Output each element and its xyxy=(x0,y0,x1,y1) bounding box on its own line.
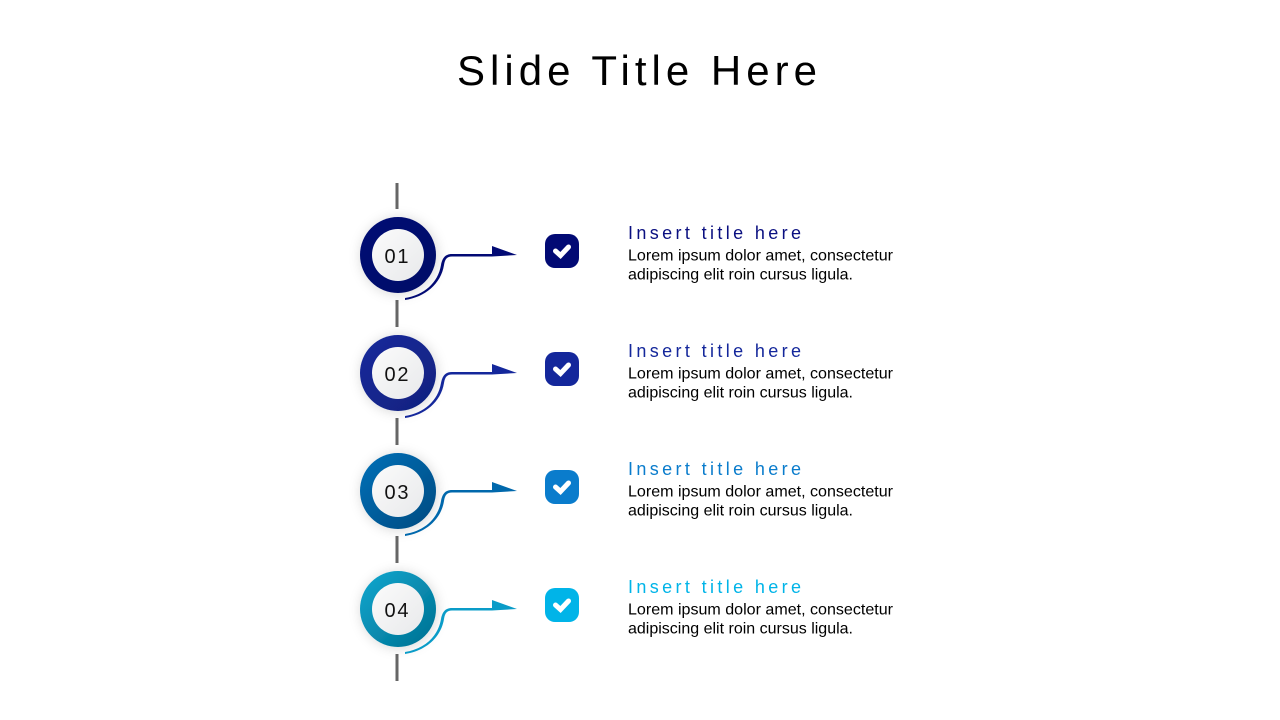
badge 04 xyxy=(360,571,436,647)
arrow connector 03 xyxy=(405,482,517,536)
step 04 xyxy=(360,571,894,654)
badge 04: 04 xyxy=(384,600,408,622)
text block 02: Insert title here xyxy=(628,341,801,361)
timeline segments xyxy=(396,183,398,681)
icon: check 01 xyxy=(545,234,579,268)
text block 03: Lorem ipsum dolor amet, consectetur xyxy=(628,484,894,500)
badge 02 xyxy=(360,335,436,411)
badge 03: 03 xyxy=(384,482,408,504)
text block 03: adipiscing elit roin cursus ligula. xyxy=(628,502,853,520)
badge 02: 02 xyxy=(384,364,408,386)
arrow connector 01 xyxy=(405,246,517,300)
text block 01: adipiscing elit roin cursus ligula. xyxy=(628,266,853,284)
text block 01: Insert title here xyxy=(628,223,801,243)
badge 01: 01 xyxy=(384,246,408,268)
step 01 xyxy=(360,217,894,300)
text block 02 xyxy=(628,341,894,402)
icon: check 04 xyxy=(545,588,579,622)
icon: check 03 xyxy=(545,470,579,504)
badge 01 xyxy=(360,217,436,293)
text block 04 xyxy=(628,577,894,638)
text block 04: Lorem ipsum dolor amet, consectetur xyxy=(628,602,894,618)
text block 01: Lorem ipsum dolor amet, consectetur xyxy=(628,248,894,264)
text block 02: Lorem ipsum dolor amet, consectetur xyxy=(628,366,894,382)
badge 03 xyxy=(360,453,436,529)
step 02 xyxy=(360,335,894,418)
text block 04: adipiscing elit roin cursus ligula. xyxy=(628,620,853,638)
text block 01 xyxy=(628,223,894,284)
arrow connector 02 xyxy=(405,364,517,418)
arrow connector 04 xyxy=(405,600,517,654)
text block 03 xyxy=(628,459,894,520)
title: Slide Title Here xyxy=(457,47,817,94)
icon: check 02 xyxy=(545,352,579,386)
text block 03: Insert title here xyxy=(628,459,801,479)
text block 04: Insert title here xyxy=(628,577,801,597)
text block 02: adipiscing elit roin cursus ligula. xyxy=(628,384,853,402)
step 03 xyxy=(360,453,894,536)
